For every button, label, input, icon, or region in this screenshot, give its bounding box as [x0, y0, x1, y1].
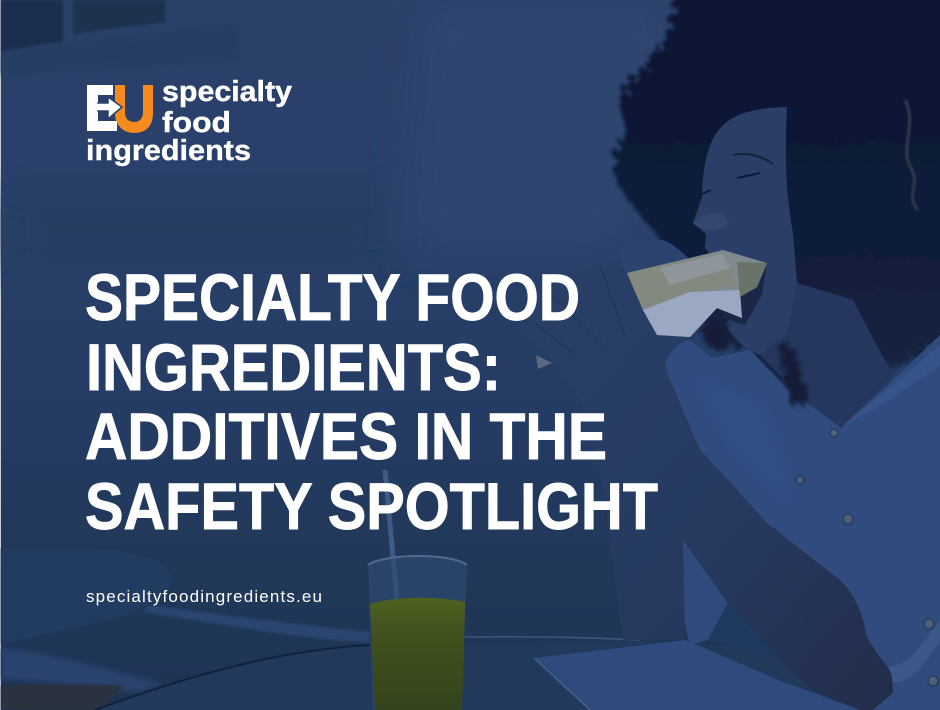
- woman: hair: [613, 0, 940, 387]
- logo wordmark: food: food: [162, 107, 231, 139]
- title line 4: SAFETY SPOTLIGHT: [85, 469, 658, 543]
- logo: [86, 76, 292, 167]
- open notebook on the table: [534, 640, 860, 710]
- shirt buttons: [796, 429, 938, 686]
- logo mark: orange U: [115, 85, 153, 133]
- logo mark: E with arrow: [87, 85, 122, 131]
- background table and furniture: [1, 548, 940, 710]
- glass of green juice: [368, 470, 467, 710]
- woman: face and neck: [693, 107, 893, 428]
- title line 1: SPECIALTY FOOD: [85, 260, 580, 334]
- hair strands over neck and shirt: [700, 322, 808, 405]
- title: [85, 260, 658, 543]
- logo wordmark: specialty: specialty: [162, 76, 292, 108]
- title line 2: INGREDIENTS:: [86, 330, 501, 404]
- woman: shirt: [665, 335, 940, 710]
- website url: specialtyfoodingredients.eu: [86, 587, 322, 606]
- sandwich: [580, 250, 767, 337]
- upper fingers: [620, 239, 688, 274]
- title line 3: ADDITIVES IN THE: [85, 399, 607, 473]
- logo wordmark: ingredients: ingredients: [86, 135, 251, 167]
- woman: hand and arms: [525, 260, 893, 710]
